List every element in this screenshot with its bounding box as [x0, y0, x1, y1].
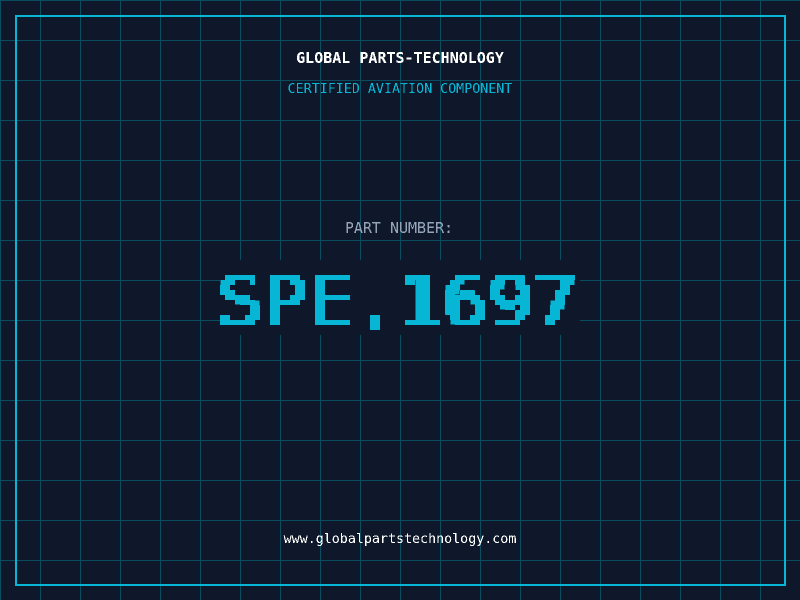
- part number value: 1697: [398, 261, 578, 341]
- part number value: [218, 261, 578, 350]
- part number panel: [218, 260, 580, 350]
- part number value: SPE: [218, 261, 353, 341]
- part number label: PART NUMBER:: [345, 219, 453, 237]
- part number value: .: [353, 268, 397, 350]
- subtitle: CERTIFIED AVIATION COMPONENT: [288, 82, 512, 97]
- website url: www.globalpartstechnology.com: [284, 532, 516, 547]
- title: GLOBAL PARTS-TECHNOLOGY: [296, 49, 504, 67]
